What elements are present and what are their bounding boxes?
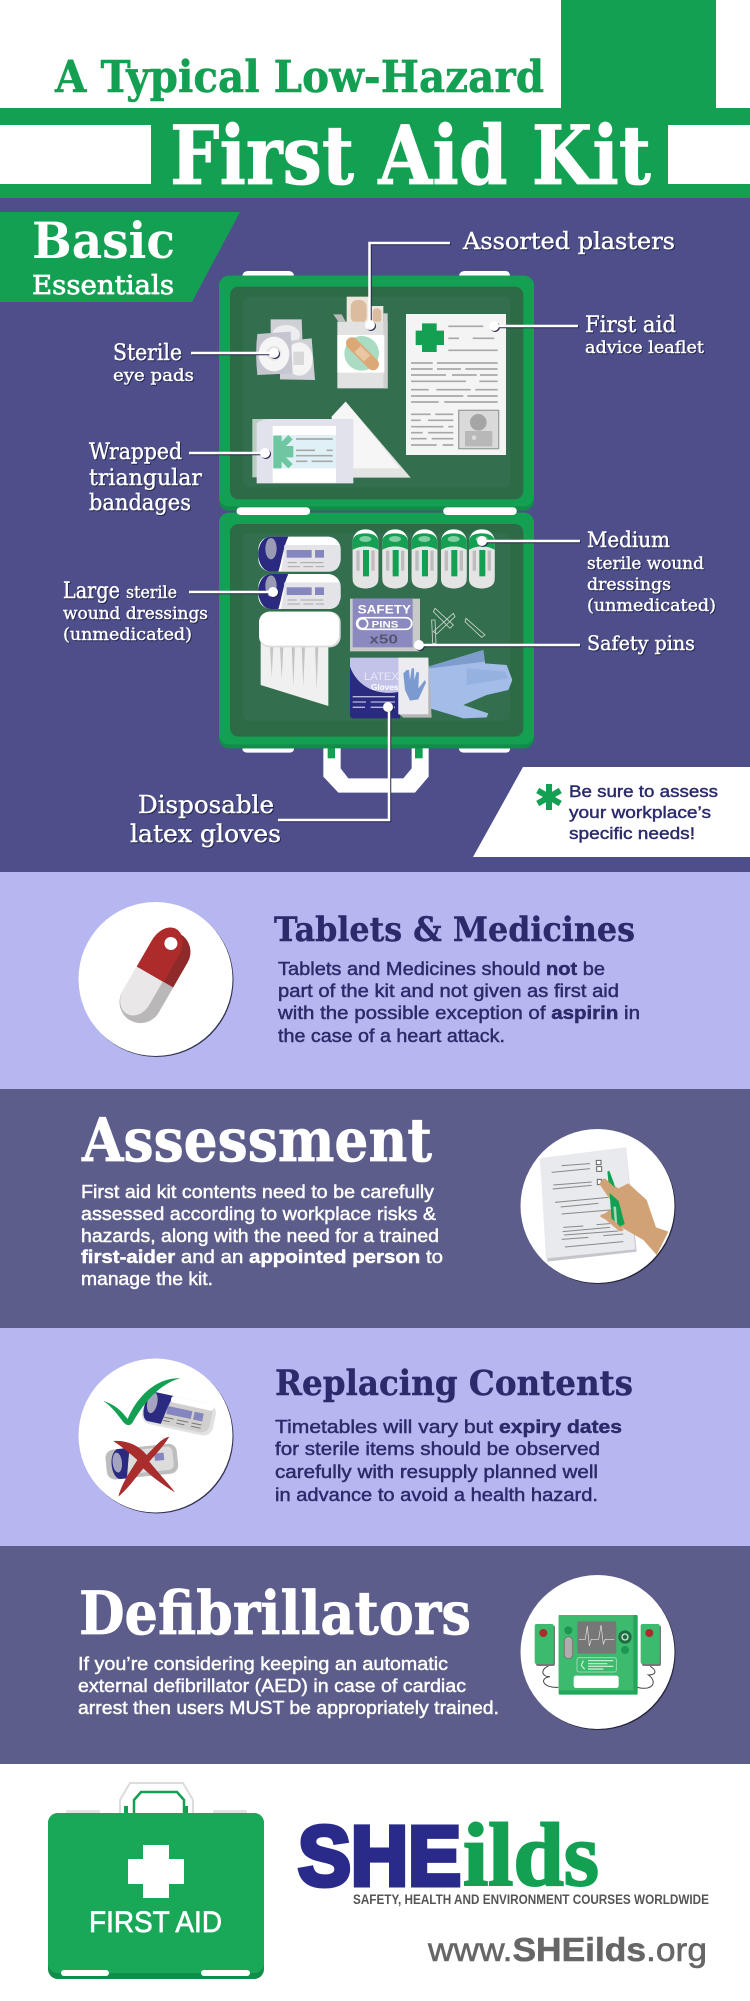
- icon: checklist and hand: [540, 1147, 668, 1262]
- label: sterile eye pads: eye pads: [113, 366, 194, 386]
- icon: first aid case: FIRST AID: [89, 1906, 222, 1939]
- item: triangular bandage: [252, 402, 411, 483]
- label: wrapped triangular bandages: triangular: [89, 466, 202, 491]
- item: safety pins box: [350, 599, 420, 651]
- label: large sterile wound dressings: (unmedicated): [63, 625, 192, 645]
- text: assessment body: manage the kit.: [81, 1268, 213, 1289]
- label: medium sterile wound dressings: Medium: [587, 528, 670, 552]
- text: assessment body: hazards, along with the need for a trained: [81, 1225, 439, 1246]
- label: medium sterile wound dressings: [477, 528, 716, 616]
- label: disposable latex gloves: latex gloves: [130, 820, 281, 848]
- text: assessment body: first-aider and an appointed person to: [81, 1246, 443, 1267]
- text: replacing body: [275, 1416, 622, 1505]
- text: assessment body: [81, 1181, 443, 1289]
- text: replacing body: Timetables will vary but expiry dates: [275, 1416, 622, 1437]
- label: sterile eye pads: Sterile: [113, 341, 182, 366]
- label: assorted plasters: [365, 229, 675, 330]
- icon: defibrillator: [535, 1615, 661, 1695]
- icon: first aid case: [48, 1783, 264, 1979]
- panel: basic essentials kit: [0, 198, 750, 873]
- label: first aid advice leaflet: [489, 313, 704, 358]
- banner: basic essentials: Essentials: [32, 271, 174, 301]
- label: large sterile wound dressings: sterile: [126, 583, 177, 603]
- icon: tick and cross dressings: [103, 1378, 218, 1497]
- label: first aid advice leaflet: First aid: [585, 313, 676, 338]
- label: first aid advice leaflet: advice leaflet: [585, 338, 704, 358]
- text: defibrillators body: If you’re considering keeping an automatic: [78, 1653, 448, 1674]
- item: large sterile dressings: [258, 537, 341, 609]
- label: large sterile wound dressings: wound dressings: [63, 604, 208, 624]
- heading: tablets and medicines: Tablets & Medicines: [274, 910, 635, 950]
- heading: replacing contents: Replacing Contents: [275, 1363, 633, 1404]
- label: wrapped triangular bandages: Wrapped: [89, 440, 182, 465]
- panel: tablets and medicines: [0, 872, 750, 1089]
- callout: assess workplace needs: Be sure to assess: [569, 782, 718, 801]
- icon: capsule: [112, 921, 199, 1031]
- item: handle: [323, 747, 429, 793]
- item: safety pins box: SAFETY: [358, 602, 411, 616]
- item: latex gloves: LATEX: [364, 671, 399, 683]
- callout: assess workplace needs: [473, 767, 750, 857]
- banner: basic essentials: Basic: [32, 211, 175, 270]
- text: tablets body: the case of a heart attack.: [278, 1025, 505, 1046]
- label: wrapped triangular bandages: [89, 440, 270, 516]
- heading: defibrillators: Defibrillators: [79, 1579, 471, 1649]
- text: tablets body: Tablets and Medicines should not be: [278, 958, 605, 979]
- panel: replacing contents: [0, 1328, 750, 1546]
- text: tablets body: [277, 958, 640, 1046]
- panel: header: [0, 0, 750, 204]
- label: medium sterile wound dressings: dressings: [587, 575, 671, 595]
- item: safety pins box: PINS: [372, 619, 398, 629]
- illustration: kit lid: [219, 271, 534, 515]
- panel: assessment: [0, 1089, 750, 1328]
- text: replacing body: in advance to avoid a health hazard.: [275, 1484, 598, 1505]
- label: large sterile wound dressings: [63, 579, 278, 645]
- logo: SHEilds: ilds: [463, 1806, 599, 1905]
- panel: footer: [0, 1764, 750, 2001]
- logo: SHEilds: SHE: [298, 1809, 461, 1903]
- item: latex gloves: Gloves: [371, 682, 399, 692]
- icon: green asterisk: [538, 784, 560, 810]
- item: latex gloves: [350, 650, 512, 718]
- label: medium sterile wound dressings: (unmedicated): [587, 596, 716, 616]
- banner: basic essentials: [0, 211, 240, 302]
- text: replacing body: carefully with resupply planned well: [275, 1461, 598, 1482]
- label: medium sterile wound dressings: sterile wound: [587, 554, 704, 574]
- item: medium sterile dressings: [353, 529, 495, 588]
- text: assessment body: First aid kit contents need to be carefully: [81, 1181, 435, 1202]
- label: wrapped triangular bandages: bandages: [89, 491, 191, 516]
- website url: www.SHEilds .org: [427, 1931, 707, 1968]
- callout: assess workplace needs: specific needs!: [569, 824, 695, 843]
- text: replacing body: for sterile items should be observed: [275, 1438, 600, 1459]
- panel: defibrillators: [0, 1546, 750, 1764]
- label: safety pins: [414, 631, 695, 655]
- text: assessment body: assessed according to workplace risks &: [81, 1203, 437, 1224]
- text: tablets body: with the possible exception of aspirin in: [277, 1002, 640, 1023]
- item: eye pads: [256, 319, 315, 380]
- logo: SHEilds: [298, 1806, 599, 1905]
- text: defibrillators body: [78, 1653, 499, 1718]
- text: defibrillators body: arrest then users MUST be appropriately trained.: [78, 1697, 499, 1718]
- item: safety pins box: x50: [369, 631, 398, 646]
- label: assorted plasters: Assorted plasters: [462, 229, 675, 255]
- label: large sterile wound dressings: Large: [63, 579, 120, 604]
- item: assorted plasters: [333, 297, 388, 388]
- heading: a typical low-hazard: A Typical Low-Hazard: [54, 52, 544, 103]
- text: tablets body: part of the kit and not given as first aid: [278, 980, 619, 1001]
- heading: assessment: Assessment: [81, 1106, 432, 1176]
- illustration: kit base: [219, 507, 534, 793]
- label: disposable latex gloves: Disposable: [138, 791, 274, 819]
- label: sterile eye pads: [113, 341, 279, 386]
- item: lid hinges: [237, 507, 517, 515]
- label: safety pins: Safety pins: [587, 631, 695, 655]
- heading: first aid kit: First Aid Kit: [170, 109, 651, 204]
- item: bandage roll: [259, 612, 341, 706]
- item: loose safety pins: [432, 608, 485, 643]
- text: defibrillators body: external defibrillator (AED) in case of cardiac: [78, 1675, 466, 1696]
- item: advice leaflet: [406, 314, 506, 455]
- label: disposable latex gloves: [130, 702, 393, 848]
- callout: assess workplace needs: your workplace’s: [569, 803, 711, 822]
